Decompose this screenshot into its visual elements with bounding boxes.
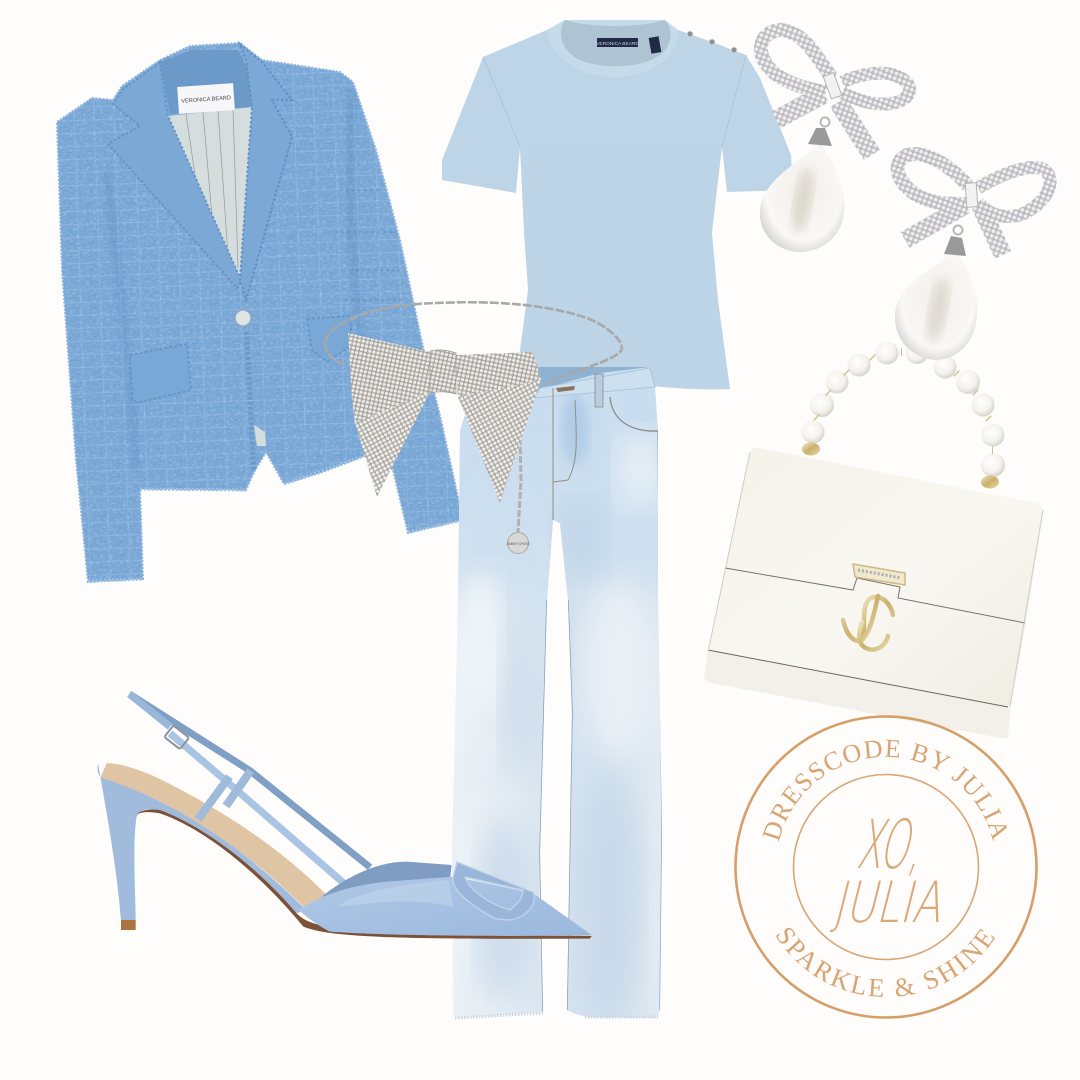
stamp outer ring [736, 716, 1036, 1018]
earring cap [944, 236, 966, 256]
fly [553, 388, 576, 520]
left wing [348, 333, 430, 425]
back quarter [97, 763, 307, 921]
chain [325, 302, 622, 384]
tee ribbing [516, 147, 730, 389]
heel tip [121, 920, 136, 930]
bag back [705, 568, 1026, 738]
sole [137, 809, 592, 939]
shoe inner [322, 862, 452, 897]
flap seam [725, 568, 1025, 623]
frayed hem [88, 452, 463, 581]
sleeve seams [483, 55, 746, 147]
stamp: dresscode by julia [734, 715, 1038, 1019]
left pocket flap [130, 344, 191, 403]
strap tip [129, 694, 170, 727]
pocket [610, 397, 658, 431]
pendant disc: JIMMY CHOO [507, 542, 530, 546]
waistband interior [535, 367, 650, 392]
right pocket flap [307, 316, 352, 362]
earring cap [808, 128, 832, 146]
lining glimpse at hem [254, 425, 266, 446]
pendant disc [507, 532, 530, 554]
collar [160, 50, 252, 114]
earring bow [761, 30, 910, 155]
accessory: pearl bow earring two [895, 154, 1050, 360]
left lapel [108, 62, 241, 288]
garment: light wash jeans [445, 360, 670, 1025]
jeans base [452, 367, 662, 1018]
blazer texture [58, 44, 459, 582]
neck tag: VERONICA BEARD [596, 41, 639, 47]
vamp [298, 877, 592, 936]
belt loop [595, 374, 603, 407]
garment: ribbed t-shirt [442, 20, 793, 389]
tee body [442, 20, 793, 389]
stamp bottom text: SPARKLE & SHINE [776, 928, 995, 997]
brand label: VERONICA BEARD [181, 95, 231, 105]
neck rib [547, 20, 678, 77]
lining [168, 107, 252, 280]
earring link [820, 118, 830, 126]
earring link [954, 226, 962, 234]
left tail [355, 392, 430, 497]
accessory: crystal bow chain belt [325, 302, 622, 554]
flap [708, 448, 1043, 706]
neck tag [596, 36, 661, 54]
stamp inner ring [794, 774, 978, 960]
earring bow [898, 154, 1050, 255]
button [235, 310, 251, 326]
brand label [177, 83, 235, 114]
front opening fringe [246, 332, 254, 470]
bottom body [704, 650, 1010, 738]
vamp highlight [337, 880, 453, 907]
clipped wash shading [458, 367, 662, 1018]
buckle [164, 725, 189, 749]
side edge [708, 452, 1043, 706]
accessory: pearl handle bag [704, 342, 1043, 738]
rear strap [129, 694, 370, 867]
blazer body [57, 43, 463, 582]
lining pinstripes [186, 108, 238, 268]
stamp top text: DRESSCODE BY JULIA [762, 740, 1007, 842]
insole [100, 763, 330, 912]
right wing [455, 352, 541, 430]
frayed hem [455, 1013, 658, 1018]
accessory: patent slingback heel [97, 694, 592, 939]
shoulder buttons [687, 31, 737, 53]
pearl handle [802, 342, 1005, 488]
accessory: pearl bow earring one [760, 30, 910, 252]
pendant chain [518, 438, 521, 532]
lower flap seam [708, 650, 1008, 707]
earring drop pearl [760, 143, 844, 252]
jeans rivet [556, 386, 575, 392]
JC logo [843, 578, 893, 650]
cross strap [198, 771, 251, 819]
waistband front [534, 368, 655, 398]
front strap [170, 733, 352, 890]
earring drop pearl [895, 250, 977, 360]
pearl sheen [924, 277, 952, 343]
stamp script julia: JULIA [829, 870, 953, 935]
garment: tweed blazer [56, 41, 460, 583]
right tail [458, 380, 541, 503]
V logo buckle [453, 862, 534, 920]
right lapel [240, 44, 292, 300]
neck interior [561, 20, 671, 66]
pearl sheen [789, 167, 817, 233]
knot [430, 350, 456, 394]
JC clasp bar [853, 564, 905, 585]
stamp script xo: XO, [851, 806, 934, 885]
